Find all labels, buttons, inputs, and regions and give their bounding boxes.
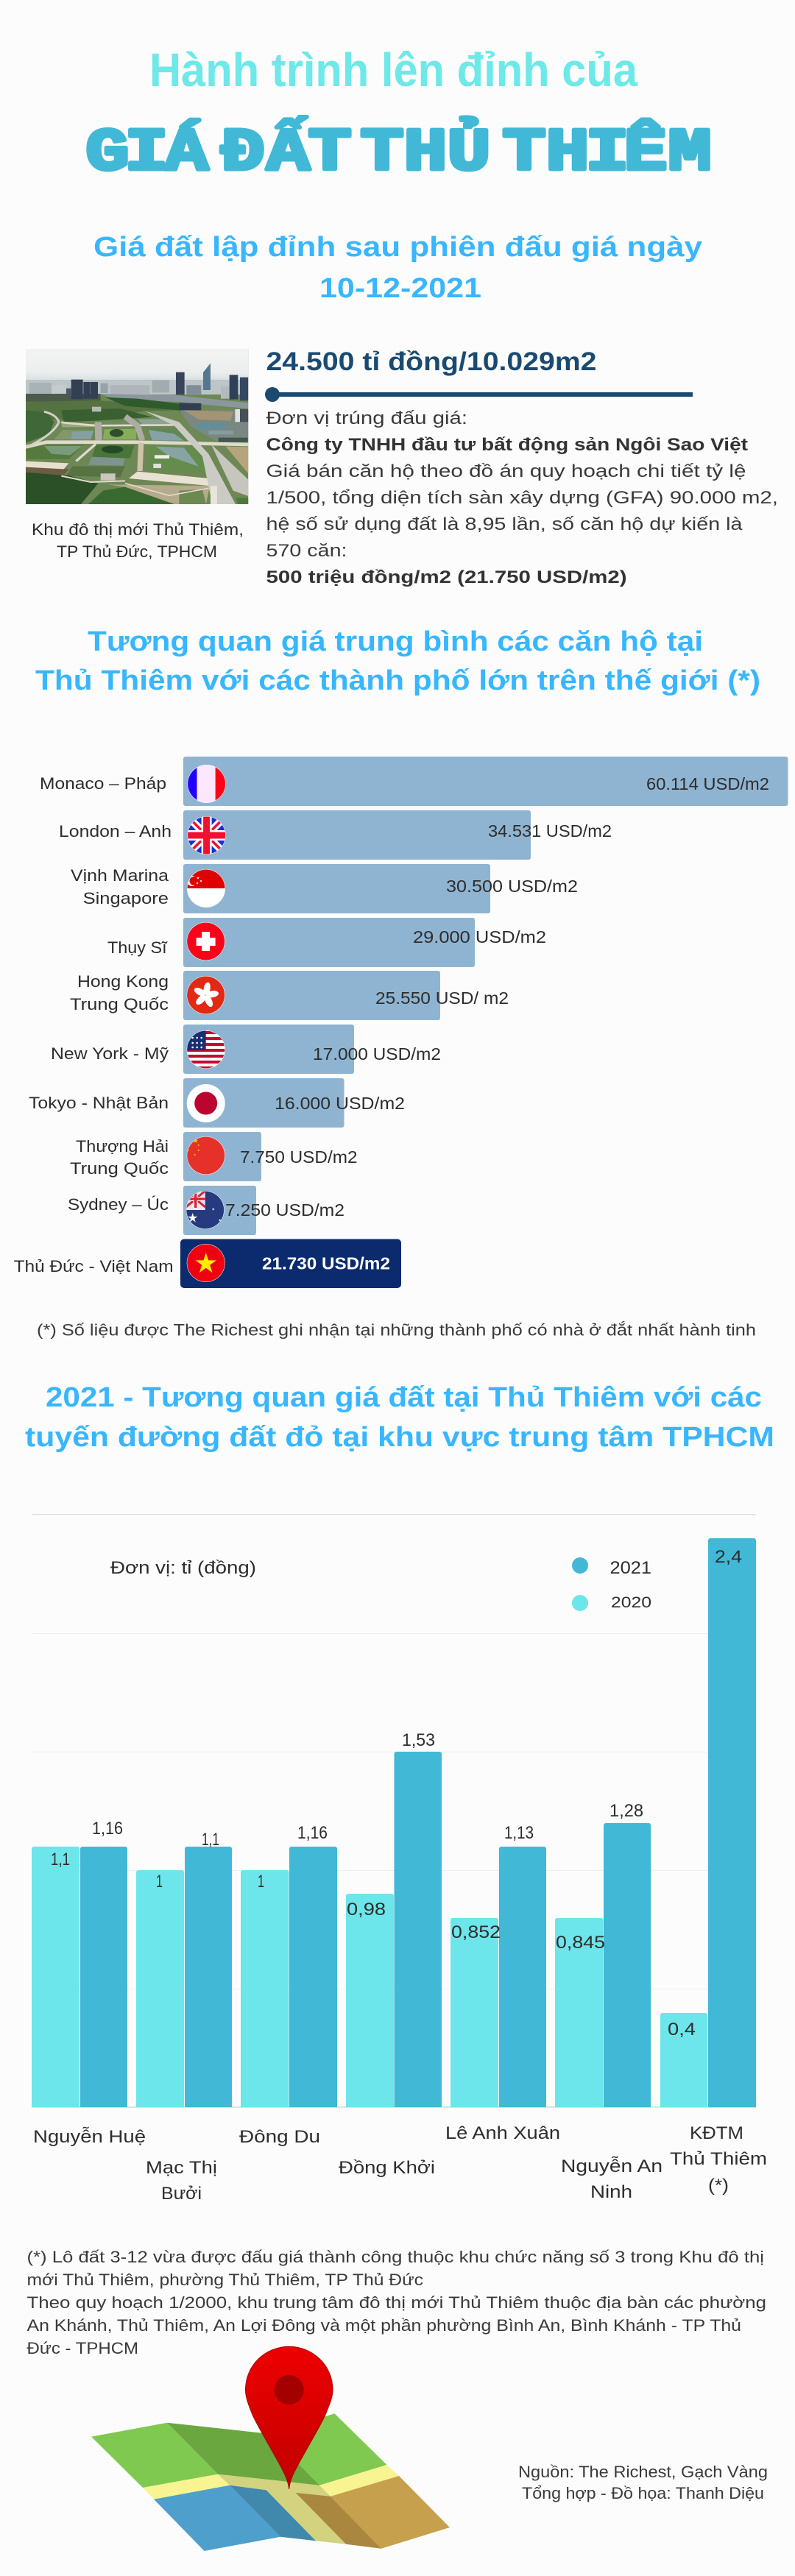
bar: Tokyo: 16.000 USD/m2: [275, 1094, 405, 1113]
street name labels: Đồng Khởi: [339, 2158, 435, 2178]
heading: street price comparison: [25, 1382, 774, 1453]
bar: Sydney: [68, 1186, 344, 1235]
street name labels: Mạc Thị: [146, 2158, 217, 2178]
icon: folded map with location pin: [91, 2346, 450, 2551]
legend: [572, 1557, 651, 1611]
bar: Marina Bay Singapore: 30.500 USD/m2: [446, 877, 578, 896]
chart columns: [32, 1538, 756, 2124]
footnote: land lot note: An Khánh, Thủ Thiêm, An Lợi Đông và một phần phường Bình An, Bình Khánh - TP Thủ: [26, 2316, 741, 2335]
bar: Switzerland: [107, 918, 546, 967]
photo caption: Khu đô thị mới Thủ Thiêm,: [32, 520, 244, 539]
heading: street price comparison: 2021 - Tương quan giá đất tại Thủ Thiêm với các: [46, 1382, 762, 1413]
column chart: land prices 2020 vs 2021: [32, 1514, 767, 2204]
bar: Monaco: 60.114 USD/m2: [646, 774, 769, 793]
2020 value labels: 1: [156, 1872, 163, 1892]
2020 value labels: 1,1: [51, 1850, 70, 1869]
heading: world price comparison: [35, 626, 760, 696]
2021 value labels: 1,28: [610, 1801, 643, 1821]
icon: location pin: [246, 2346, 333, 2489]
horizontal bar chart: apartment prices: [14, 757, 788, 1288]
bar: Monaco: Monaco – Pháp: [40, 774, 166, 793]
street name labels: (*): [708, 2176, 729, 2195]
2020 value labels: [51, 1850, 696, 2039]
auction details text: [266, 408, 778, 587]
auction price headline: 24.500 tỉ đồng/10.029m2: [266, 347, 596, 376]
auction details text: 500 triệu đồng/m2 (21.750 USD/m2): [266, 567, 627, 587]
heading: world price comparison: Tương quan giá trung bình các căn hộ tại: [88, 626, 703, 657]
auction details text: hệ số sử dụng đất là 8,95 lần, số căn hộ dự kiến là: [266, 514, 743, 534]
bar: Tokyo: [29, 1078, 405, 1128]
street name labels: Ninh: [590, 2182, 632, 2202]
auction details text: 570 căn:: [266, 541, 347, 561]
footnote: land lot note: Đức - TPHCM: [26, 2339, 138, 2357]
footnote: data source: (*) Số liệu được The Richest ghi nhận tại những thành phố có nhà ở đắt nhất hành tinh: [37, 1320, 756, 1340]
bar: Shanghai: Trung Quốc: [70, 1159, 169, 1178]
bar: London: London – Anh: [59, 822, 172, 841]
bar: Tokyo: Tokyo - Nhật Bản: [29, 1094, 169, 1112]
source credits: Nguồn: The Richest, Gạch Vàng: [518, 2463, 768, 2481]
footnote: land lot note: Theo quy hoạch 1/2000, khu trung tâm đô thị mới Thủ Thiêm thuộc địa bàn các phường: [26, 2293, 766, 2312]
bar: London: 34.531 USD/m2: [488, 821, 612, 841]
timeline divider with dot: [265, 387, 693, 402]
bar: Shanghai: Thượng Hải: [76, 1137, 169, 1156]
legend: 2021: [610, 1558, 651, 1578]
footnote: land lot note: mới Thủ Thiêm, phường Thủ Thiêm, TP Thủ Đức: [26, 2271, 423, 2289]
2021 value labels: 1,13: [504, 1823, 534, 1843]
street name labels: Bưởi: [161, 2184, 202, 2204]
bar: Monaco: [40, 757, 788, 806]
bar: New York: [51, 1025, 441, 1074]
2020 value labels: 1: [258, 1872, 264, 1892]
bar: New York: New York - Mỹ: [51, 1044, 169, 1063]
bar: Switzerland: Thụy Sĩ: [107, 938, 168, 957]
street name labels: Nguyễn Huệ: [33, 2127, 146, 2147]
bar: Thu Duc, Vietnam (highlighted): Thủ Đức - Việt Nam: [14, 1257, 174, 1275]
auction details text: Công ty TNHH đầu tư bất động sản Ngôi Sao Việt: [266, 435, 748, 455]
bar: Hong Kong: Hong Kong: [77, 972, 169, 991]
auction details text: Đơn vị trúng đấu giá:: [266, 408, 467, 428]
2020 value labels: 0,845: [556, 1933, 605, 1953]
heading: auction date: Giá đất lập đỉnh sau phiên đấu giá ngày: [93, 232, 702, 263]
footnote: land lot note: [26, 2248, 766, 2357]
street name labels: Nguyễn An: [561, 2156, 662, 2176]
2021 value labels: 2,4: [715, 1547, 742, 1567]
street name labels: Đông Du: [239, 2127, 320, 2147]
2021 value labels: 1,1: [202, 1830, 219, 1850]
title: Hành trình lên đỉnh của: [149, 43, 637, 96]
2021 value labels: 1,53: [402, 1730, 435, 1750]
photo caption: [32, 520, 244, 561]
title: GIÁ ĐẤT THỦ THIÊM: [86, 116, 712, 188]
2020 value labels: 0,852: [451, 1922, 501, 1942]
street name labels: Lê Anh Xuân: [445, 2123, 560, 2143]
bar: Marina Bay Singapore: Singapore: [83, 889, 169, 907]
chart unit: Đơn vị: tỉ (đồng): [110, 1558, 256, 1578]
title: [86, 43, 712, 188]
heading: street price comparison: tuyến đường đất đỏ tại khu vực trung tâm TPHCM: [25, 1422, 774, 1453]
bar: Hong Kong: Trung Quốc: [70, 995, 169, 1013]
source credits: [518, 2463, 768, 2502]
bar: Marina Bay Singapore: Vịnh Marina: [71, 866, 169, 885]
bar: London: [59, 810, 612, 860]
bar: Sydney: 7.250 USD/m2: [225, 1200, 344, 1220]
heading: world price comparison: Thủ Thiêm với các thành phố lớn trên thế giới (*): [35, 665, 760, 696]
2020 value labels: 0,98: [347, 1900, 386, 1919]
2021 value labels: 1,16: [92, 1819, 123, 1839]
footnote: land lot note: (*) Lô đất 3-12 vừa được đấu giá thành công thuộc khu chức năng số 3 trong Khu đô thị: [26, 2248, 764, 2266]
bar: Switzerland: 29.000 USD/m2: [413, 927, 546, 946]
source credits: Tổng hợp - Đồ họa: Thanh Diệu: [522, 2484, 764, 2502]
bar: Thu Duc, Vietnam (highlighted): [14, 1239, 401, 1288]
auction details text: 1/500, tổng diện tích sàn xây dựng (GFA) 90.000 m2,: [266, 488, 778, 508]
street name labels: [33, 2123, 767, 2204]
bar: Marina Bay Singapore: [71, 864, 578, 913]
bar: Hong Kong: [70, 971, 509, 1020]
bar: New York: 17.000 USD/m2: [313, 1044, 441, 1064]
bar: Shanghai: 7.750 USD/m2: [240, 1147, 358, 1167]
street name labels: KĐTM: [690, 2123, 743, 2143]
bar: Shanghai: [70, 1132, 358, 1181]
heading: auction date: 10-12-2021: [319, 273, 481, 304]
photo: Thu Thiem new urban area: [26, 349, 248, 504]
2021 value labels: 1,16: [297, 1823, 328, 1843]
photo caption: TP Thủ Đức, TPHCM: [57, 542, 217, 561]
bar: Hong Kong: 25.550 USD/ m2: [375, 988, 509, 1008]
bar: Sydney: Sydney – Úc: [68, 1195, 169, 1214]
street name labels: Thủ Thiêm: [670, 2149, 767, 2169]
auction details text: Giá bán căn hộ theo đồ án quy hoạch chi tiết tỷ lệ: [266, 461, 746, 481]
legend: 2020: [611, 1594, 651, 1611]
2021 value labels: [92, 1547, 742, 1850]
bar: Thu Duc, Vietnam (highlighted): 21.730 USD/m2: [262, 1254, 390, 1273]
2020 value labels: 0,4: [668, 2020, 696, 2039]
heading: auction date: [93, 232, 702, 304]
